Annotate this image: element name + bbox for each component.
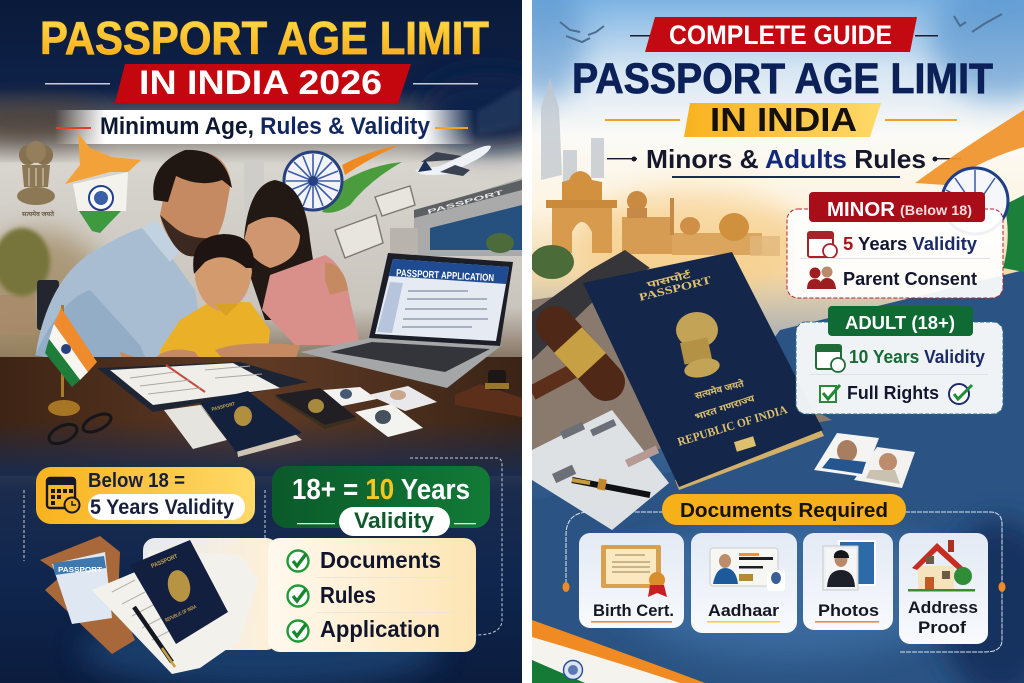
callout: 18 plus: 18+ = 10 Years bbox=[292, 474, 470, 506]
row: full rights: Full Rights bbox=[847, 383, 939, 403]
illustration: documents pile: PASSPORT bbox=[58, 567, 103, 574]
banner: in india: IN INDIA bbox=[710, 101, 857, 138]
backdrop behind documents pile bbox=[143, 538, 278, 650]
subtitle: minors and adults: Minors & Adults Rules bbox=[646, 144, 926, 174]
card: minor rules: MINOR bbox=[827, 199, 896, 221]
illustration: documents pile bbox=[40, 536, 258, 674]
card: birth certificate: Birth Cert. bbox=[593, 601, 674, 620]
icon: state emblem: सत्यमेव जयते bbox=[21, 210, 55, 218]
passport: republic of india: PASSPORT bbox=[638, 274, 713, 304]
card: address proof: Proof bbox=[918, 618, 966, 637]
card: adult rules: ADULT (18+) bbox=[845, 313, 955, 333]
passport on desk bbox=[200, 391, 302, 457]
item: documents: Documents bbox=[320, 547, 441, 573]
card: birth certificate bbox=[579, 533, 684, 628]
gavel bbox=[532, 325, 606, 393]
connector dots bbox=[562, 582, 1006, 592]
card: aadhaar bbox=[691, 533, 797, 633]
skyline bbox=[541, 78, 604, 185]
card: photos: Photos bbox=[818, 601, 879, 620]
banner: complete guide: COMPLETE GUIDE bbox=[669, 20, 892, 50]
ticket document bbox=[532, 410, 669, 530]
icon: gold emblem bbox=[676, 312, 721, 381]
passport on desk: PASSPORT bbox=[211, 401, 236, 413]
banner: in India 2026: IN INDIA 2026 bbox=[139, 64, 382, 102]
passport: republic of india: REPUBLIC OF INDIA bbox=[676, 402, 789, 449]
laptop bbox=[300, 253, 513, 388]
callout: below 18: Below 18 = bbox=[88, 470, 185, 492]
desk bbox=[0, 357, 522, 475]
callout: below 18: 5 Years Validity bbox=[90, 496, 234, 519]
callout: below 18 bbox=[36, 467, 255, 524]
row: 5 years validity bbox=[808, 232, 977, 258]
flag swoosh top right bbox=[915, 110, 1024, 272]
left background bbox=[0, 0, 560, 683]
passport: republic of india: भारत गणराज्य bbox=[694, 393, 757, 422]
icon: calendar clock bbox=[47, 478, 80, 512]
row: parent consent: Parent Consent bbox=[843, 269, 977, 289]
heading: PASSPORT AGE LIMIT bbox=[572, 55, 993, 103]
subtitle: minors and adults bbox=[607, 144, 961, 178]
icon: birds bbox=[560, 14, 1002, 42]
banner: complete guide bbox=[630, 17, 938, 52]
dashed frame: documents bbox=[566, 512, 1002, 652]
wooden stamp bbox=[455, 370, 522, 417]
pen bbox=[572, 478, 650, 495]
photo prints bbox=[814, 433, 915, 488]
row: parent consent bbox=[807, 266, 977, 289]
card: address proof bbox=[899, 533, 988, 644]
desk flag bbox=[45, 305, 97, 416]
card: minor rules: (Below 18) bbox=[900, 202, 972, 218]
card: minor rules bbox=[787, 192, 1003, 298]
flag swoosh bottom left bbox=[532, 620, 705, 683]
right background bbox=[505, 0, 1024, 683]
pill: documents required bbox=[662, 494, 906, 525]
stamps bbox=[335, 186, 415, 258]
father bbox=[35, 150, 232, 374]
second passport on desk bbox=[275, 388, 357, 429]
illustration: documents pile: PASSPORT bbox=[151, 554, 179, 570]
chair bbox=[37, 280, 59, 330]
panel: checklist bbox=[268, 538, 476, 652]
passport: republic of india bbox=[583, 252, 824, 490]
photos on desk bbox=[323, 386, 437, 437]
item: application: Application bbox=[320, 616, 440, 642]
icon: india map tricolour bbox=[65, 133, 141, 233]
panel: left poster bbox=[0, 0, 560, 683]
pill: documents required: Documents Required bbox=[680, 500, 888, 522]
row: 10 years validity bbox=[816, 345, 985, 372]
child bbox=[160, 234, 270, 360]
glasses bbox=[48, 412, 112, 445]
panel: right poster bbox=[505, 0, 1024, 683]
illustration: documents pile: REPUBLIC OF INDIA bbox=[164, 604, 198, 624]
banner: in india bbox=[605, 101, 957, 138]
grid windows bbox=[476, 86, 522, 135]
card: address proof: Address bbox=[908, 598, 978, 617]
building bbox=[390, 178, 522, 256]
row: 10 years validity: 10 Years Validity bbox=[849, 347, 985, 367]
subtitle band: Minimum Age, Rules & Validity bbox=[100, 113, 431, 140]
mother bbox=[243, 180, 360, 345]
monument: india gate and domes bbox=[530, 171, 780, 279]
row: full rights bbox=[820, 383, 972, 404]
icon: flag swoosh with chakra bbox=[284, 145, 402, 213]
card: adult rules bbox=[796, 306, 1003, 414]
card: aadhaar: Aadhaar bbox=[708, 601, 779, 620]
second passport behind bbox=[532, 250, 650, 360]
card: photos bbox=[803, 533, 893, 630]
title: PASSPORT AGE LIMIT bbox=[40, 12, 489, 64]
passport: republic of india: पासपोर्ट bbox=[644, 268, 693, 290]
icon: airplane bbox=[415, 146, 491, 176]
callout: 18 plus bbox=[272, 466, 490, 536]
hands and arms bbox=[156, 343, 300, 357]
row: 5 years validity: 5 Years Validity bbox=[843, 234, 977, 254]
icon: state emblem bbox=[17, 141, 55, 218]
passport: republic of india: सत्यमेव जयते bbox=[693, 377, 746, 401]
laptop: PASSPORT APPLICATION bbox=[396, 268, 494, 284]
desk fade bbox=[0, 427, 522, 476]
illustration: family bbox=[35, 150, 360, 374]
item: rules: Rules bbox=[320, 582, 376, 608]
item: rules bbox=[288, 582, 376, 608]
building: PASSPORT bbox=[427, 190, 505, 216]
subtitle band bbox=[55, 110, 475, 144]
open documents on desk bbox=[97, 362, 308, 412]
callout: 18 plus: Validity bbox=[354, 508, 435, 533]
sheet under passport bbox=[164, 405, 227, 449]
dashed connectors bbox=[24, 458, 502, 640]
